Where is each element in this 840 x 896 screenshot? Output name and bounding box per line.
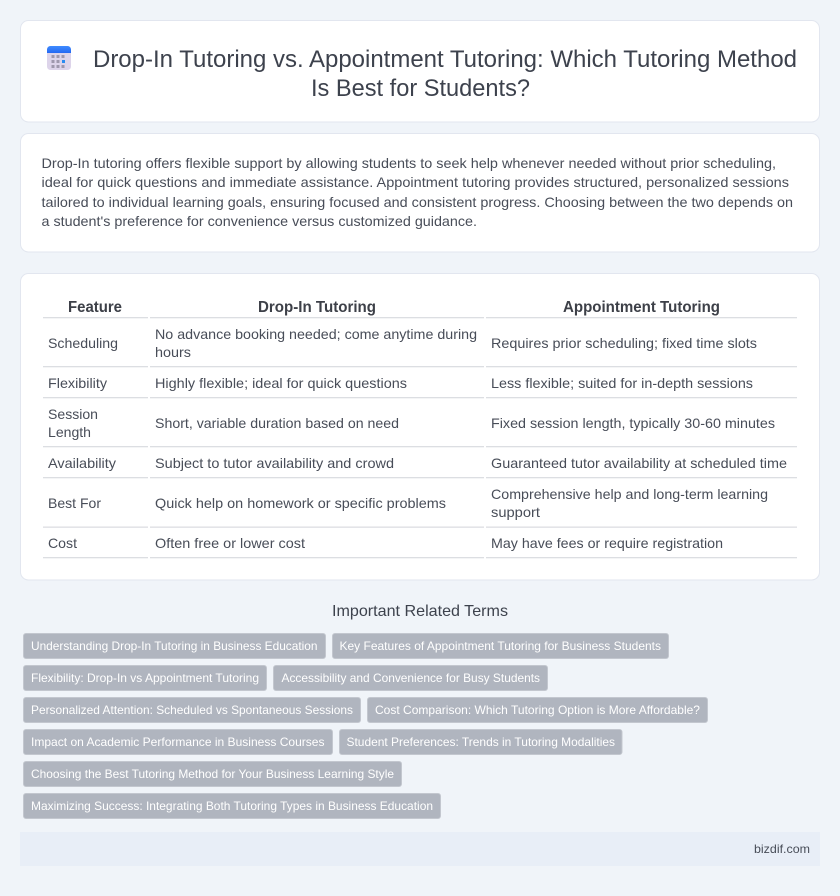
tag: key features — [332, 634, 668, 658]
tag: flexibility — [24, 666, 266, 690]
panel: introduction paragraph — [20, 134, 820, 252]
tag: maximizing success — [24, 794, 440, 818]
row: scheduling: No advance booking needed; come anytime during — [155, 326, 477, 342]
tag: academic performance — [24, 730, 332, 754]
row: session length: Short, variable duration based on need — [155, 415, 399, 431]
row: flexibility: Flexibility — [48, 375, 107, 391]
row: session length — [48, 406, 775, 440]
row: cost: Cost — [48, 535, 77, 551]
row: cost — [48, 535, 723, 551]
related term tags — [24, 634, 708, 818]
intro text: Drop-In tutoring offers flexible support by allowing students to seek help whenever needed without prior scheduling, — [42, 155, 776, 171]
panel: comparison table — [20, 274, 820, 580]
table header row: Feature — [68, 299, 122, 316]
row: flexibility: Highly flexible; ideal for quick questions — [155, 375, 407, 391]
footer: bizdif.com — [754, 842, 810, 856]
tag: cost comparison: Cost Comparison: Which Tutoring Option is More Affordable? — [375, 703, 700, 717]
table header row: Drop-In Tutoring — [258, 299, 376, 316]
row: best for — [48, 486, 768, 520]
row: scheduling: Scheduling — [48, 335, 118, 351]
row: availability: Subject to tutor availability and crowd — [155, 455, 394, 471]
table header row — [68, 299, 720, 316]
panel: title header — [20, 20, 820, 122]
tag: accessibility — [274, 666, 548, 690]
tag: key features: Key Features of Appointment Tutoring for Business Students — [340, 639, 661, 653]
tag: cost comparison — [368, 698, 708, 722]
row: availability: Availability — [48, 455, 116, 471]
row: scheduling: Requires prior scheduling; fixed time slots — [491, 335, 757, 351]
tag: flexibility: Flexibility: Drop-In vs Appointment Tutoring — [31, 671, 259, 685]
row: session length: Session — [48, 406, 98, 422]
tag: personalized attention: Personalized Attention: Scheduled vs Spontaneous Sessions — [31, 703, 353, 717]
heading: important related terms: Important Related Terms — [332, 603, 508, 620]
tag: academic performance: Impact on Academic Performance in Business Courses — [31, 735, 324, 749]
tag: personalized attention — [24, 698, 360, 722]
tag: understanding drop-in — [24, 634, 326, 658]
row: flexibility: Less flexible; suited for in-depth sessions — [491, 375, 753, 391]
title: Drop-In Tutoring vs. Appointment Tutoring: Which Tutoring Method — [93, 46, 797, 73]
row: cost: Often free or lower cost — [155, 535, 305, 551]
tag: understanding drop-in: Understanding Drop-In Tutoring in Business Education — [31, 639, 318, 653]
title — [93, 46, 797, 102]
intro text — [42, 155, 793, 229]
row: scheduling — [48, 326, 757, 360]
tag: student preferences — [340, 730, 622, 754]
row: best for: support — [491, 504, 540, 520]
icon: calendar — [47, 46, 71, 70]
table header row: Appointment Tutoring — [563, 299, 720, 316]
intro text: ideal for quick questions and immediate assistance. Appointment tutoring provides structured, personalized sessions — [42, 174, 789, 190]
footer — [20, 832, 820, 866]
row: cost: May have fees or require registration — [491, 535, 723, 551]
tag: maximizing success: Maximizing Success: Integrating Both Tutoring Types in Business Education — [31, 799, 433, 813]
tag: choosing best method: Choosing the Best Tutoring Method for Your Business Learning Style — [31, 767, 394, 781]
tag: choosing best method — [24, 762, 402, 786]
intro text: tailored to individual learning goals, ensuring focused and consistent progress. Choosing between the two depends on — [42, 194, 793, 210]
row: session length: Length — [48, 424, 91, 440]
row: session length: Fixed session length, typically 30-60 minutes — [491, 415, 775, 431]
tag: student preferences: Student Preferences: Trends in Tutoring Modalities — [346, 735, 615, 749]
title: Is Best for Students? — [311, 75, 530, 102]
tag: accessibility: Accessibility and Convenience for Busy Students — [282, 671, 540, 685]
row: availability: Guaranteed tutor availability at scheduled time — [491, 455, 787, 471]
row: flexibility — [48, 375, 753, 391]
row: best for: Comprehensive help and long-term learning — [491, 486, 768, 502]
row: scheduling: hours — [155, 344, 191, 360]
row: availability — [48, 455, 787, 471]
row: best for: Quick help on homework or specific problems — [155, 495, 446, 511]
row: best for: Best For — [48, 495, 101, 511]
intro text: a student's preference for convenience versus customized guidance. — [42, 213, 477, 229]
